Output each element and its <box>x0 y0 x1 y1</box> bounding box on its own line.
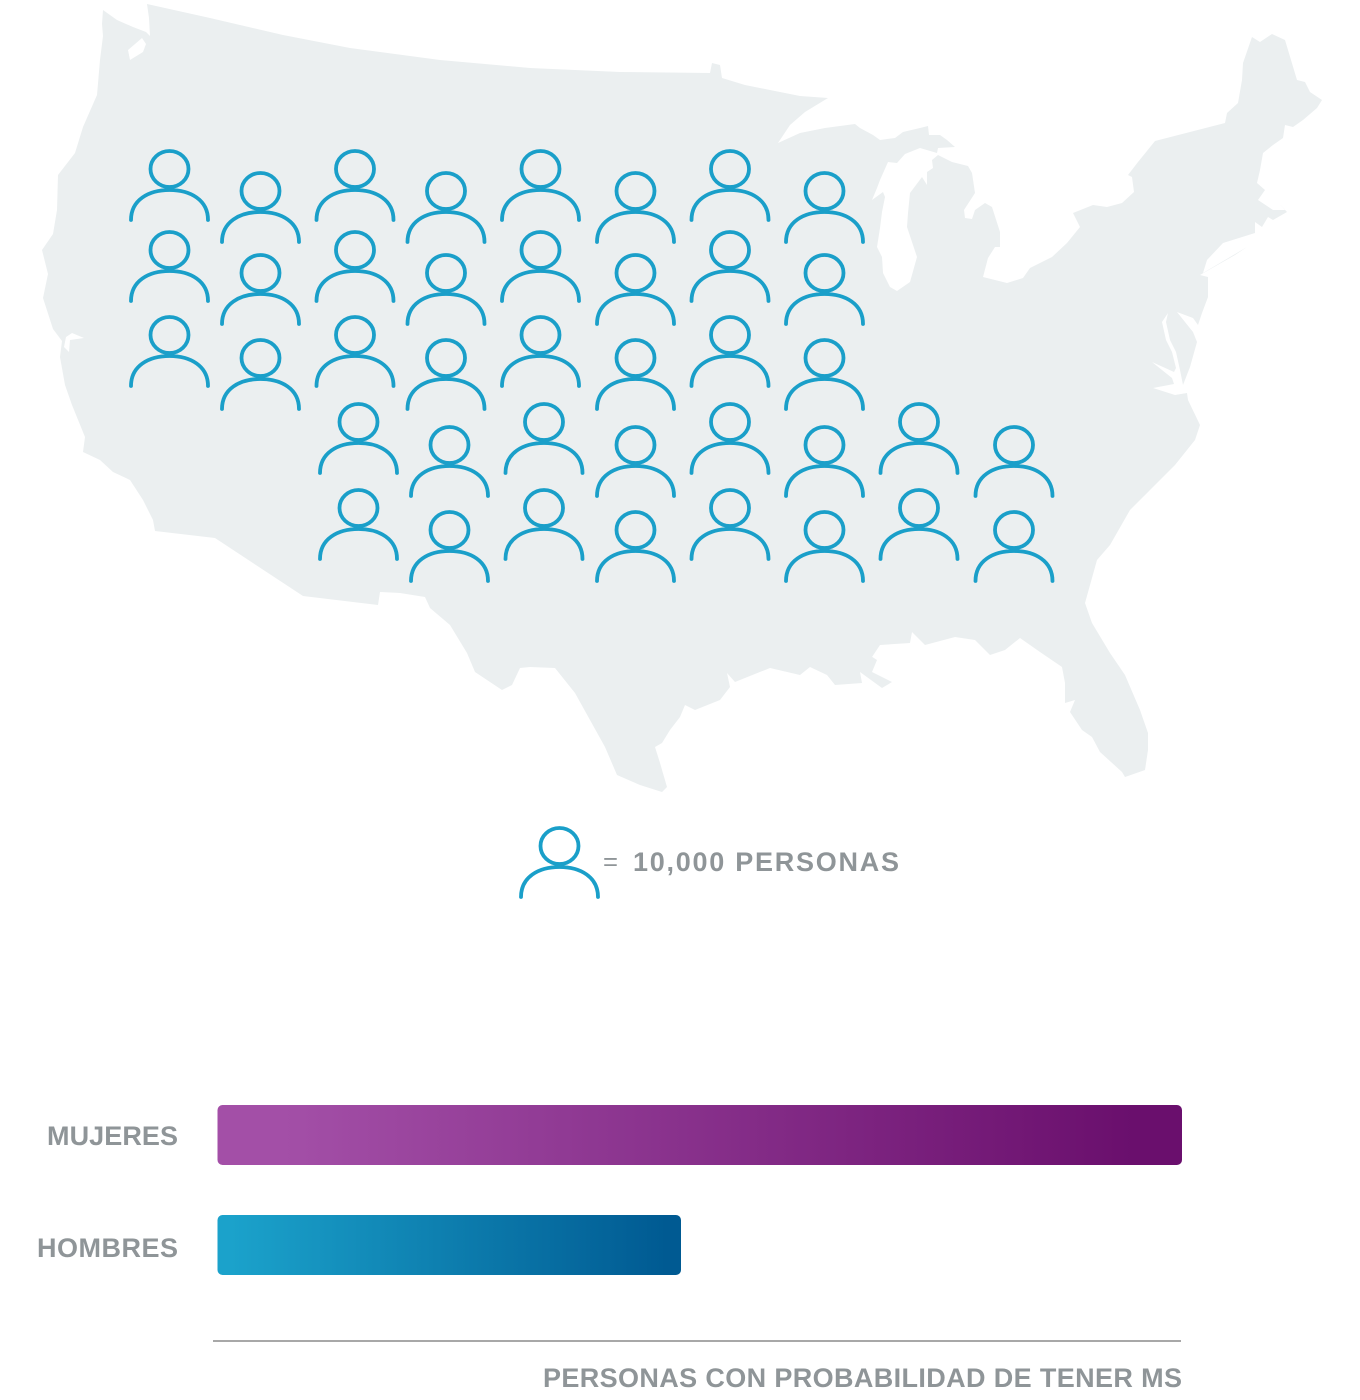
map of the United States <box>42 4 1322 792</box>
person: upper block, column 1, row 1 <box>131 151 208 220</box>
person: upper block, column 4, row 3 <box>408 340 484 409</box>
person: upper block, column 2, row 2 <box>222 255 299 324</box>
legend icon <box>521 828 598 897</box>
person: upper block, column 8, row 3 <box>786 340 863 409</box>
person: upper block, column 1, row 3 <box>131 317 208 386</box>
person: upper block, column 5, row 2 <box>502 232 579 301</box>
label: mujeres: MUJERES <box>47 1121 178 1151</box>
legend equals sign: = <box>603 848 618 876</box>
pictogram: people on the map <box>131 151 1052 581</box>
person: upper block, column 5, row 3 <box>502 317 579 386</box>
person: lower block, column 1, row 2 <box>320 490 397 559</box>
bar chart: women vs men <box>37 1105 1182 1393</box>
person: upper block, column 2, row 1 <box>222 173 299 242</box>
legend: one icon equals 10,000 people <box>521 828 899 897</box>
person: upper block, column 3, row 3 <box>316 317 394 386</box>
person: upper block, column 1, row 2 <box>131 232 208 301</box>
person: lower block, column 1, row 1 <box>320 404 397 473</box>
person: lower block, column 4, row 2 <box>597 512 674 581</box>
person: lower block, column 5, row 1 <box>692 404 768 473</box>
axis line <box>213 1340 1181 1342</box>
person: lower block, column 2, row 2 <box>411 512 488 581</box>
person: upper block, column 3, row 2 <box>316 232 394 301</box>
person: lower block, column 3, row 1 <box>506 404 582 473</box>
legend text: 10,000 PERSONAS <box>633 847 899 877</box>
person: lower block, column 8, row 1 <box>976 427 1052 496</box>
person: upper block, column 6, row 3 <box>597 340 674 409</box>
person: upper block, column 8, row 1 <box>786 173 863 242</box>
person: upper block, column 4, row 2 <box>408 255 484 324</box>
person: lower block, column 7, row 1 <box>880 404 958 473</box>
person: upper block, column 5, row 1 <box>502 151 579 220</box>
label: hombres: HOMBRES <box>37 1233 178 1263</box>
person: lower block, column 5, row 2 <box>692 490 768 559</box>
axis caption: PERSONAS CON PROBABILIDAD DE TENER MS <box>543 1363 1182 1393</box>
person: upper block, column 7, row 1 <box>692 151 768 220</box>
person: upper block, column 3, row 1 <box>316 151 394 220</box>
bar: hombres <box>218 1215 681 1275</box>
person: upper block, column 7, row 2 <box>692 232 768 301</box>
person: lower block, column 7, row 2 <box>880 490 958 559</box>
person: lower block, column 3, row 2 <box>506 490 582 559</box>
bar: mujeres <box>218 1105 1182 1165</box>
person: lower block, column 8, row 2 <box>976 512 1052 581</box>
person: upper block, column 6, row 1 <box>597 173 674 242</box>
person: upper block, column 4, row 1 <box>408 173 484 242</box>
person: upper block, column 6, row 2 <box>597 255 674 324</box>
person: lower block, column 4, row 1 <box>597 427 674 496</box>
person: upper block, column 7, row 3 <box>692 317 768 386</box>
person: lower block, column 2, row 1 <box>411 427 488 496</box>
person: upper block, column 8, row 2 <box>786 255 863 324</box>
person: lower block, column 6, row 1 <box>786 427 863 496</box>
person: lower block, column 6, row 2 <box>786 512 863 581</box>
person: upper block, column 2, row 3 <box>222 340 299 409</box>
